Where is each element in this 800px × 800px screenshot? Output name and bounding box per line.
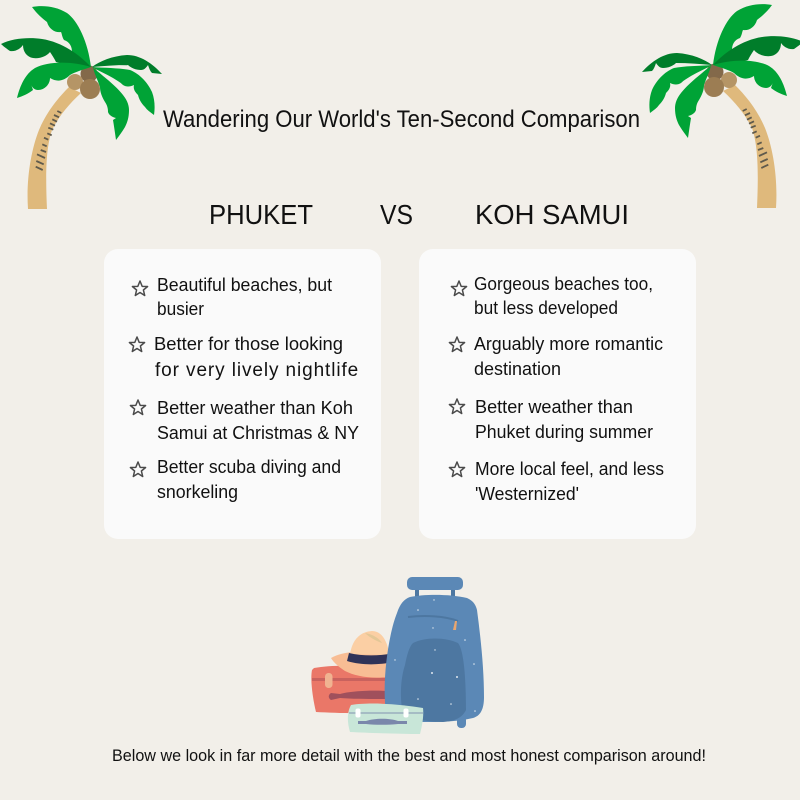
icon: luggage and hat: [311, 577, 484, 734]
list item: weather: Phuket during summer: [475, 422, 653, 442]
list item: romance: Arguably more romantic: [474, 334, 663, 354]
list item: romance: [449, 334, 663, 379]
list item: diving: snorkeling: [157, 482, 238, 502]
list item: weather: [449, 397, 653, 442]
list item: beaches: Beautiful beaches, but: [157, 275, 332, 295]
list item: beaches: [132, 275, 332, 319]
list item: nightlife: [129, 334, 359, 381]
list item: beaches: [451, 274, 653, 318]
list item: nightlife: for very lively nightlife: [155, 360, 359, 381]
list item: beaches: Gorgeous beaches too,: [474, 274, 653, 294]
list item: local feel: 'Westernized': [475, 484, 579, 504]
footer text: Below we look in far more detail with the best and most honest comparison around!: [112, 746, 706, 765]
heading: comparison names: VS: [380, 199, 413, 230]
panel: Phuket: [104, 249, 381, 539]
heading: comparison names: PHUKET: [209, 199, 313, 230]
list item: romance: destination: [474, 359, 561, 379]
title: Wandering Our World's Ten-Second Comparison: [163, 106, 640, 133]
list item: weather: Samui at Christmas & NY: [157, 423, 359, 443]
list item: weather: [130, 398, 359, 443]
heading: comparison names: [209, 199, 629, 230]
list item: local feel: More local feel, and less: [475, 459, 664, 479]
list item: nightlife: Better for those looking: [154, 334, 343, 354]
heading: comparison names: KOH SAMUI: [475, 199, 629, 230]
list item: beaches: but less developed: [474, 298, 618, 318]
list item: weather: Better weather than Koh: [157, 398, 353, 418]
icon: right palm tree: [642, 4, 800, 208]
list item: local feel: [449, 459, 664, 504]
panel: Koh Samui: [419, 249, 696, 539]
list item: diving: Better scuba diving and: [157, 457, 341, 477]
icon: left palm tree: [1, 6, 162, 209]
list item: diving: [130, 457, 341, 502]
list item: beaches: busier: [157, 299, 204, 319]
list item: weather: Better weather than: [475, 397, 633, 417]
